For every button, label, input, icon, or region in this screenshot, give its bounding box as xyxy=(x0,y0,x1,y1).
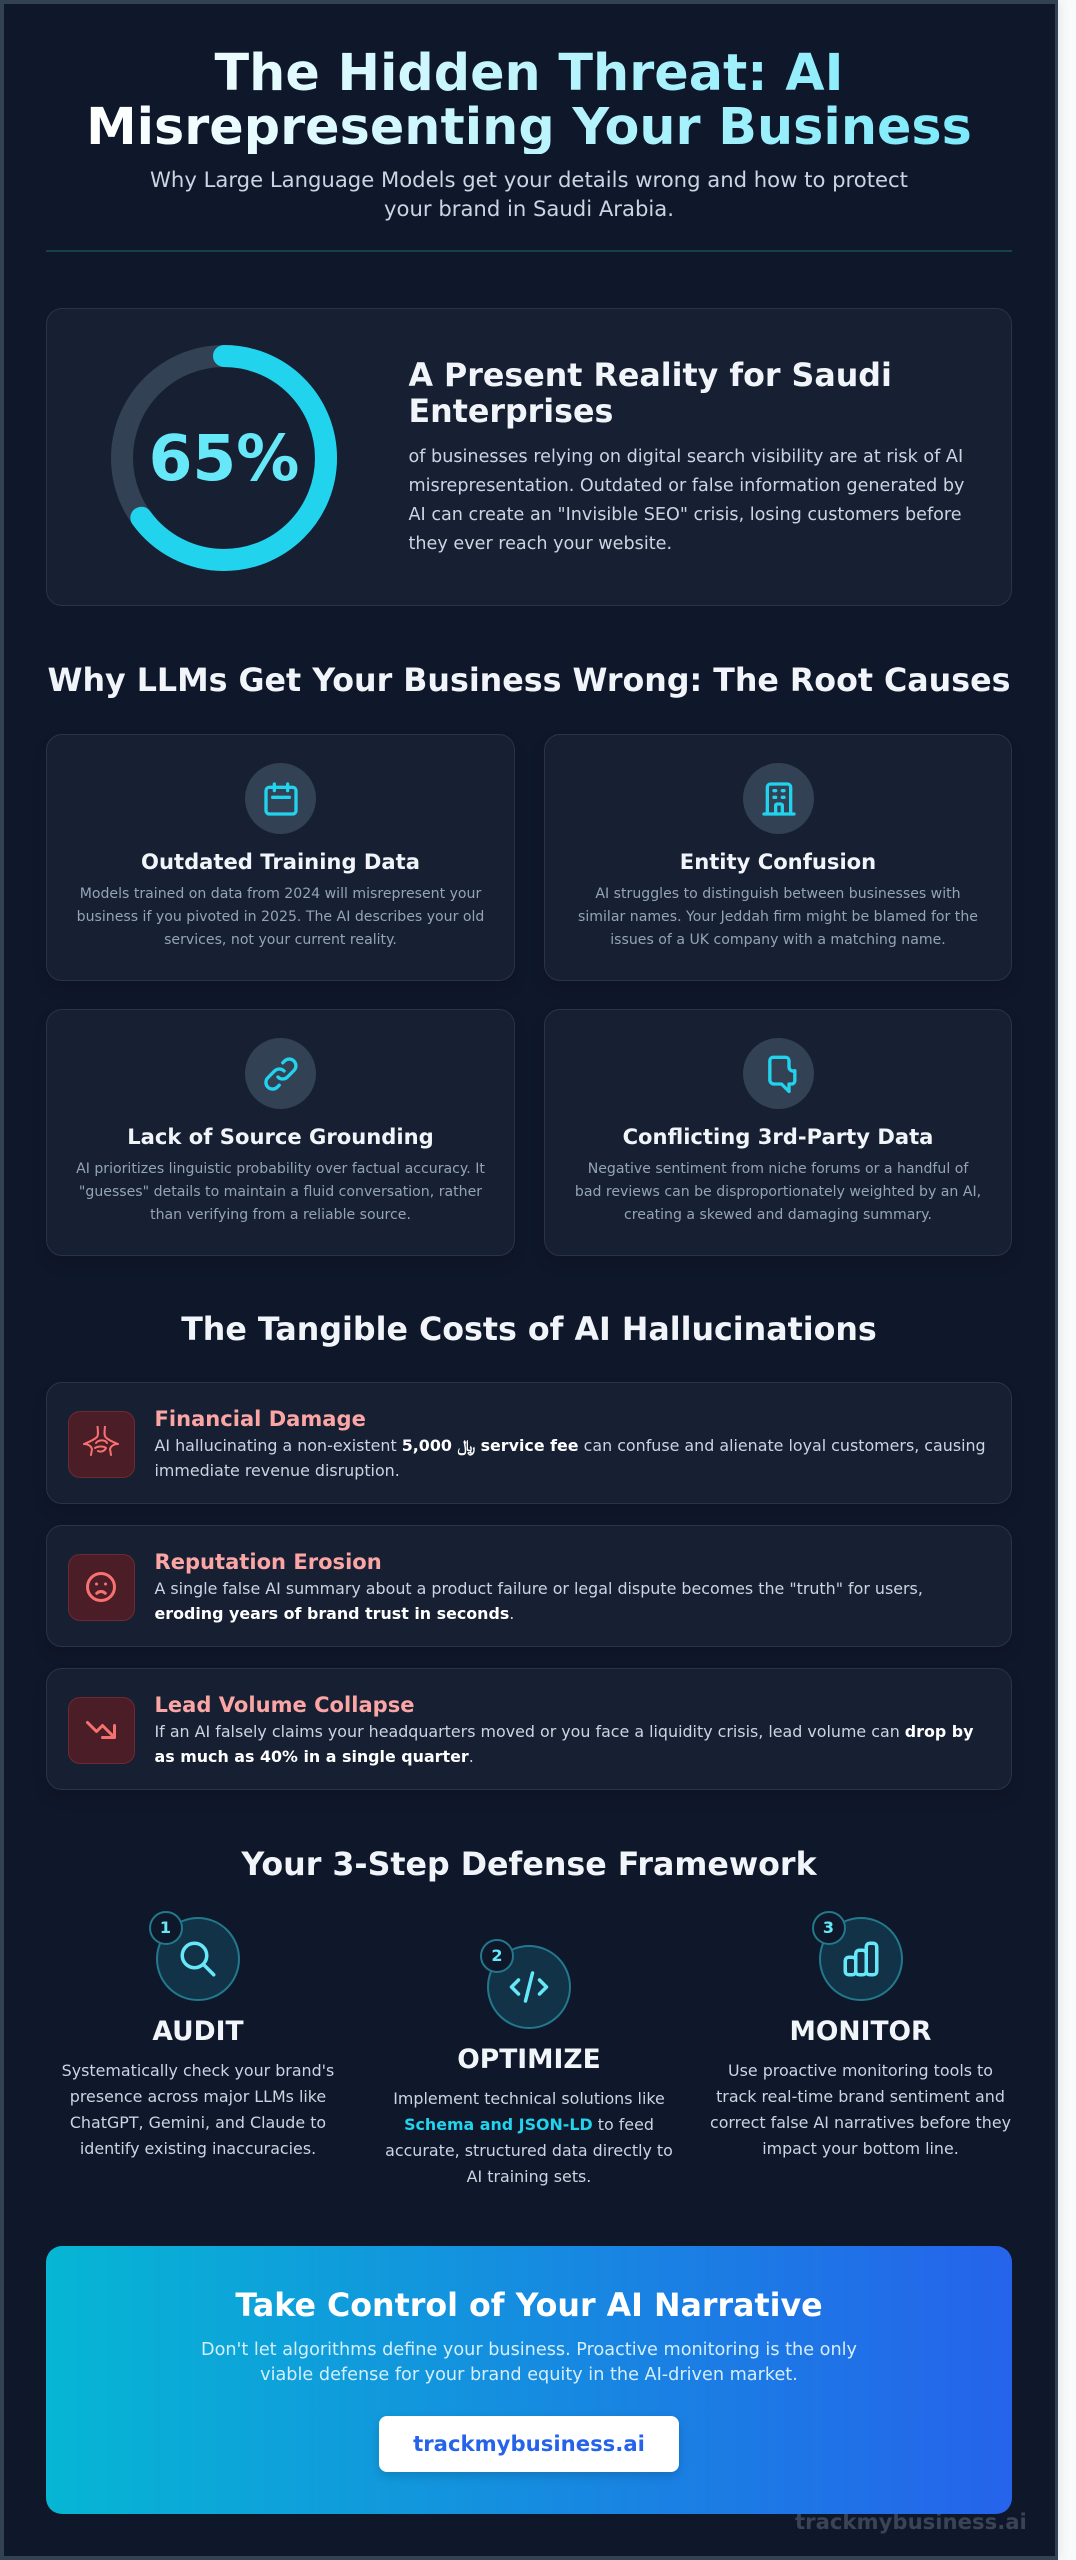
badge 3 xyxy=(812,1911,846,1945)
icon: search xyxy=(156,1917,240,2001)
badge 3: 3 xyxy=(823,1918,834,1937)
card text xyxy=(575,1161,981,1223)
cta heading: Take Control of Your AI Narrative xyxy=(235,2288,823,2324)
icon: link xyxy=(245,1038,316,1109)
card text: issues of a UK company with a matching name. xyxy=(610,932,946,948)
subtitle: Why Large Language Models get your details wrong and how to protect xyxy=(150,167,908,192)
subtitle xyxy=(150,167,908,220)
card text: "guesses" details to maintain a fluid conversation, rather xyxy=(79,1184,482,1200)
row text xyxy=(154,1722,974,1766)
card text: business if you pivoted in 2025. The AI describes your old xyxy=(77,909,484,925)
heading: defense framework: Your 3-Step Defense Framework xyxy=(241,1846,817,1882)
card text: Models trained on data from 2024 will misrepresent your xyxy=(80,886,481,902)
icon: sad face xyxy=(68,1554,135,1621)
row title: Financial Damage xyxy=(154,1406,366,1431)
step title: MONITOR xyxy=(790,2016,931,2047)
stat description: they ever reach your website. xyxy=(408,534,672,554)
stat description: AI can create an "Invisible SEO" crisis, losing customers before xyxy=(408,505,962,525)
step text xyxy=(710,2061,1011,2158)
step text: correct false AI narratives before they xyxy=(710,2113,1011,2132)
card text: services, not your current reality. xyxy=(164,932,397,948)
donut chart: 65% xyxy=(111,345,337,571)
icon: building xyxy=(743,763,814,834)
row text: immediate revenue disruption. xyxy=(154,1461,400,1480)
cta button xyxy=(379,2416,679,2472)
row text: as much as 40% in a single quarter. xyxy=(154,1747,474,1766)
heading: tangible costs: The Tangible Costs of AI Hallucinations xyxy=(181,1312,877,1348)
icon: code xyxy=(487,1945,571,2029)
subtitle: your brand in Saudi Arabia. xyxy=(384,196,674,220)
step text: Implement technical solutions like xyxy=(393,2089,665,2108)
step text: ChatGPT, Gemini, and Claude to xyxy=(70,2113,326,2132)
icon: bar chart xyxy=(818,1917,902,2001)
heading: root causes: Why LLMs Get Your Business Wrong: The Root Causes xyxy=(48,663,1010,699)
card title: Outdated Training Data xyxy=(141,849,420,874)
step text: impact your bottom line. xyxy=(762,2139,959,2158)
step text xyxy=(385,2089,673,2186)
panel: source grounding xyxy=(46,1009,515,1256)
panel: conflicting data xyxy=(544,1009,1012,1256)
panel: reputation erosion xyxy=(46,1525,1012,1647)
stat description xyxy=(408,447,964,554)
divider xyxy=(46,250,1012,252)
stat heading: A Present Reality for Saudi xyxy=(408,358,892,394)
card text: bad reviews can be disproportionately weighted by an AI, xyxy=(575,1184,981,1200)
panel: outdated training data xyxy=(46,734,515,981)
step text: AI training sets. xyxy=(467,2167,591,2186)
badge 2 xyxy=(480,1939,514,1973)
card text: creating a skewed and damaging summary. xyxy=(624,1207,932,1223)
step 3: monitor xyxy=(710,1911,1011,2158)
card text xyxy=(77,886,484,948)
title: The Hidden Threat: AI xyxy=(214,42,843,102)
row text: AI hallucinating a non-existent 5,000 ﷼ service fee can confuse and alienate loyal customers, causing xyxy=(154,1436,986,1455)
card text xyxy=(578,886,978,948)
step title: OPTIMIZE xyxy=(457,2044,601,2075)
card title: Conflicting 3rd-Party Data xyxy=(623,1124,933,1149)
panel: financial damage xyxy=(46,1382,1012,1504)
step text: Use proactive monitoring tools to xyxy=(728,2061,993,2080)
card text: similar names. Your Jeddah firm might be blamed for the xyxy=(578,909,978,925)
watermark: trackmybusiness.ai xyxy=(795,2509,1027,2534)
step text xyxy=(62,2061,334,2158)
title xyxy=(46,46,1012,154)
cta text: viable defense for your brand equity in the AI-driven market. xyxy=(260,2364,798,2384)
row text: eroding years of brand trust in seconds. xyxy=(154,1604,514,1623)
step 2: optimize xyxy=(385,1939,673,2186)
step text: identify existing inaccuracies. xyxy=(80,2139,316,2158)
panel: lead volume collapse xyxy=(46,1668,1012,1790)
step title: AUDIT xyxy=(152,2016,244,2047)
icon: calendar xyxy=(245,763,316,834)
row title: Reputation Erosion xyxy=(154,1549,382,1574)
badge 1: 1 xyxy=(160,1918,171,1937)
step text: accurate, structured data directly to xyxy=(385,2141,673,2160)
card text: than verifying from a reliable source. xyxy=(150,1207,411,1223)
row text: If an AI falsely claims your headquarters moved or you face a liquidity crisis, lead volume can drop by xyxy=(154,1722,974,1741)
panel: stat card xyxy=(46,308,1012,606)
cta text: Don't let algorithms define your business. Proactive monitoring is the only xyxy=(201,2340,857,2360)
badge 1 xyxy=(148,1911,182,1945)
step 1: audit xyxy=(62,1911,334,2158)
donut chart: 65%: 65% xyxy=(149,422,299,495)
row text xyxy=(154,1579,923,1623)
stat heading: Enterprises xyxy=(408,394,613,430)
step text: presence across major LLMs like xyxy=(70,2087,326,2106)
icon: trending down xyxy=(68,1697,135,1764)
step text: track real-time brand sentiment and xyxy=(716,2087,1005,2106)
row text: A single false AI summary about a product failure or legal dispute becomes the "truth" for users, xyxy=(154,1579,923,1598)
step text: Systematically check your brand's xyxy=(62,2061,334,2080)
row text xyxy=(154,1436,986,1480)
card title: Lack of Source Grounding xyxy=(127,1124,434,1149)
row title: Lead Volume Collapse xyxy=(154,1692,415,1717)
cta text xyxy=(201,2340,857,2384)
icon: broken funds xyxy=(68,1411,135,1478)
card text: AI prioritizes linguistic probability over factual accuracy. It xyxy=(76,1161,485,1177)
badge 2: 2 xyxy=(491,1946,503,1965)
cta button: trackmybusiness.ai xyxy=(413,2431,645,2456)
card text: Negative sentiment from niche forums or a handful of xyxy=(588,1161,968,1177)
title: Misrepresenting Your Business xyxy=(86,96,972,156)
card text xyxy=(76,1161,485,1223)
icon: speech bubble xyxy=(743,1038,814,1109)
card text: AI struggles to distinguish between businesses with xyxy=(595,886,961,902)
panel: entity confusion xyxy=(544,734,1012,981)
step text: Schema and JSON-LD to feed xyxy=(404,2115,654,2134)
stat heading xyxy=(408,358,892,430)
card title: Entity Confusion xyxy=(680,849,876,874)
stat description: of businesses relying on digital search visibility are at risk of AI xyxy=(408,447,963,467)
panel: call to action xyxy=(46,2246,1012,2514)
stat description: misrepresentation. Outdated or false information generated by xyxy=(408,476,964,496)
